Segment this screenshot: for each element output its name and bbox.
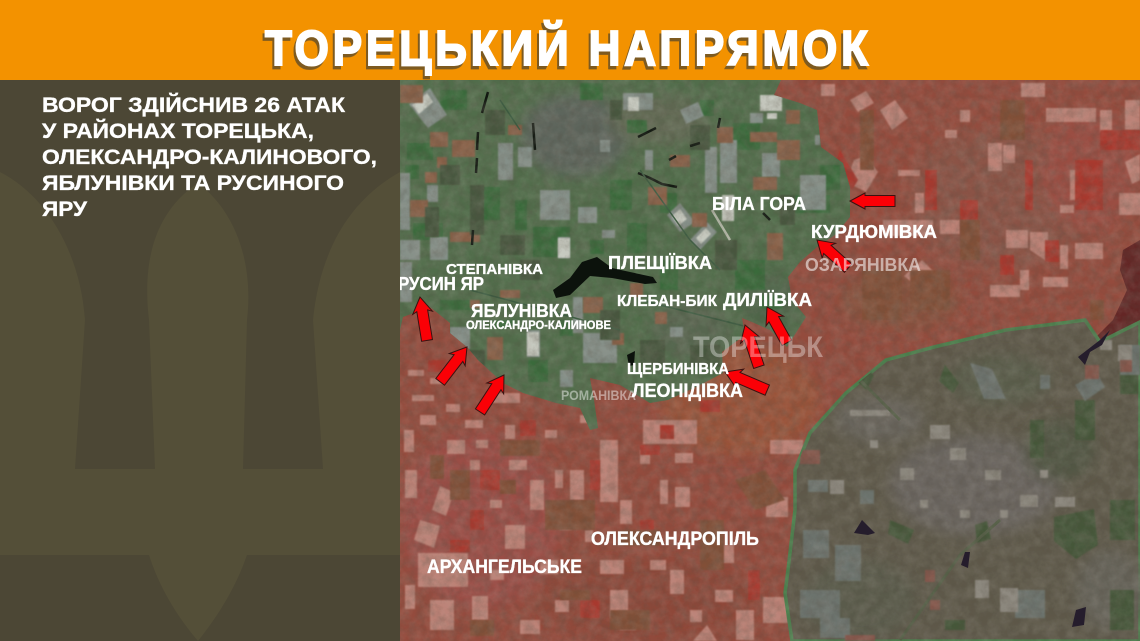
text block: attacks summary: ЯБЛУНІВКИ ТА РУСИНОГО (42, 171, 344, 195)
place labels: ЯБЛУНІВКА (471, 301, 572, 321)
header bar (0, 0, 1140, 80)
place labels: ДИЛІЇВКА (723, 290, 812, 310)
place labels: РОМАНІВКА (561, 387, 636, 403)
red occupied zone (400, 80, 1140, 641)
green contested zone (400, 80, 860, 440)
left panel (0, 80, 400, 641)
place labels: ОЗАРЯНІВКА (805, 255, 921, 275)
arrow: Bila Hora (850, 193, 895, 209)
place labels: СТЕПАНІВКА (446, 261, 543, 278)
texture (400, 80, 1140, 641)
place labels: РУСИН ЯР (398, 274, 484, 294)
grey unoccupied zone (785, 320, 1140, 641)
place labels: ЛЕОНІДІВКА (632, 381, 743, 402)
place labels: ОЛЕКСАНДРО-КАЛИНОВЕ (466, 318, 611, 332)
arrow: Shcherbynivka (724, 368, 770, 396)
place labels (398, 194, 937, 578)
panel: satellite map (398, 80, 1140, 641)
place labels: ТОРЕЦЬК (693, 331, 824, 364)
place labels: ПЛЕЩІЇВКА (608, 253, 712, 273)
place labels: КЛЕБАН-БИК (617, 293, 718, 310)
arrow: Yablunivka (435, 346, 468, 386)
place labels: ОЛЕКСАНДРОПІЛЬ (591, 529, 759, 550)
text block: attacks summary: У РАЙОНАХ ТОРЕЦЬКА, (42, 118, 314, 143)
icon: trident emblem watermark (0, 172, 400, 641)
arrow: Rusyn Yar (412, 296, 434, 342)
water: grey zone ponds (854, 330, 1110, 627)
text block: attacks summary: ЯРУ (42, 197, 88, 221)
title: ТОРЕЦЬКИЙ НАПРЯМОК (265, 21, 868, 76)
arrow: Kurdiumivka (816, 239, 852, 273)
water: Pleshchiivka reservoir (553, 257, 657, 298)
place labels: АРХАНГЕЛЬСЬКЕ (427, 557, 582, 578)
arrow: Dyliivka (765, 306, 792, 346)
arrow: Oleksandro-Kalynove (474, 374, 504, 416)
text block: attacks summary (42, 92, 377, 221)
water: small pond (627, 351, 635, 366)
arrow: Toretsk centre (740, 324, 765, 369)
text block: attacks summary: ВОРОГ ЗДІЙСНИВ 26 АТАК (42, 92, 346, 117)
place labels: ЩЕРБИНІВКА (627, 361, 729, 378)
place labels: КУРДЮМІВКА (811, 222, 937, 242)
text block: attacks summary: ОЛЕКСАНДРО-КАЛИНОВОГО, (42, 145, 377, 169)
place labels: БІЛА ГОРА (712, 194, 806, 214)
